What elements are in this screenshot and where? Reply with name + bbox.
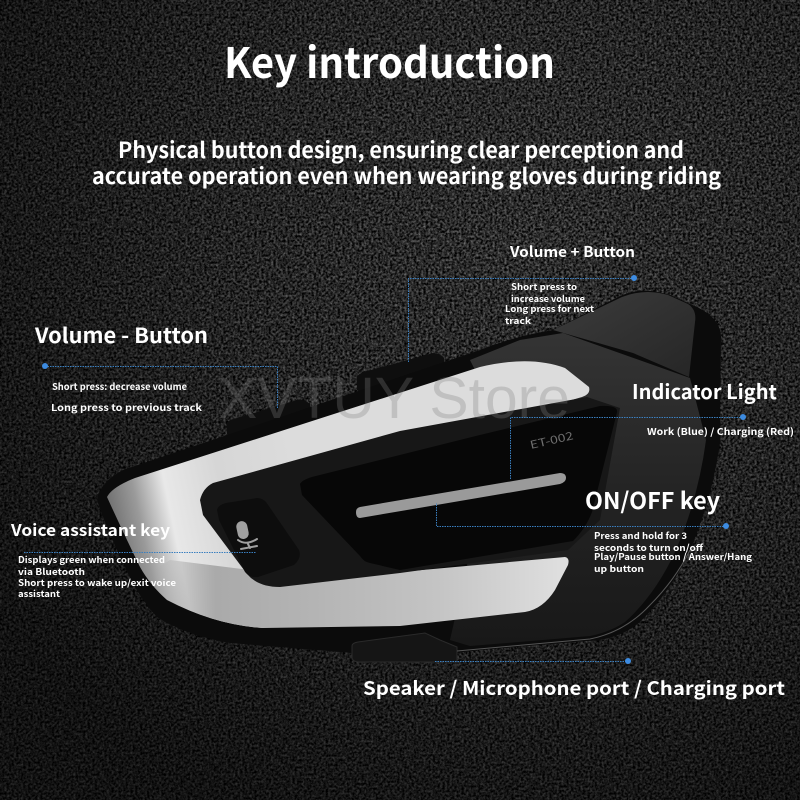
silver trim: lower: [146, 557, 569, 628]
label: volume plus: Volume + Button: [509, 241, 635, 262]
subtitle: accurate operation even when wearing gloves during riding: [92, 159, 721, 191]
label: ports: Speaker / Microphone port / Charging port: [363, 674, 785, 701]
voice assistant key: [217, 498, 300, 577]
label: volume minus: Short press: decrease volume: [52, 379, 187, 393]
device: intercom: [97, 291, 721, 662]
label: voice assistant: [10, 517, 176, 600]
title: Key introduction: [224, 30, 555, 91]
leader dots: [42, 275, 746, 664]
label: indicator light: Indicator Light: [632, 376, 778, 405]
label: volume plus: track: [505, 314, 532, 327]
label: voice assistant: Displays green when connected: [18, 553, 165, 566]
label: voice assistant: via Bluetooth: [18, 565, 85, 578]
label: on/off key: Press and hold for 3: [594, 529, 687, 542]
label: volume plus: Short press to: [511, 280, 577, 293]
device body: [97, 291, 721, 653]
label: indicator light: [632, 376, 794, 438]
black control panel: [200, 397, 620, 587]
label: volume plus: increase volume: [511, 292, 585, 305]
leader lines: [24, 278, 743, 662]
label: on/off key: Play/Pause button / Answer/Hang: [594, 550, 753, 563]
label: on/off key: [585, 482, 753, 575]
label: voice assistant: Voice assistant key: [10, 517, 170, 541]
model label: ET-002: [528, 427, 575, 453]
label: volume minus: Long press to previous track: [51, 400, 202, 414]
light bar: [356, 473, 566, 518]
subtitle: Physical button design, ensuring clear perception and: [118, 133, 684, 165]
label: on/off key: ON/OFF key: [585, 482, 720, 516]
watermark: XVTUY Store: [218, 366, 570, 431]
icon: microphone: [235, 520, 257, 549]
label: on/off key: up button: [594, 562, 644, 575]
button: volume minus: [227, 400, 310, 442]
label: indicator light: Work (Blue) / Charging (Red): [647, 424, 794, 438]
label: volume plus: [505, 241, 635, 327]
label: voice assistant: assistant: [18, 587, 60, 600]
upper wing panel: [553, 292, 695, 377]
port: [352, 633, 457, 662]
silver trim: upper and left: [107, 361, 589, 628]
label: voice assistant: Short press to wake up/exit voice: [18, 576, 176, 589]
lower rim highlight: [457, 550, 690, 651]
upper grey housing: [450, 333, 706, 646]
label: on/off key: seconds to turn on/off: [594, 541, 704, 554]
subtitle: [92, 133, 721, 191]
label: volume minus: [34, 320, 208, 414]
label: volume minus: Volume - Button: [34, 320, 208, 350]
label: volume plus: Long press for next: [505, 302, 594, 315]
button: volume plus: [357, 353, 444, 396]
display panel: [300, 406, 617, 570]
